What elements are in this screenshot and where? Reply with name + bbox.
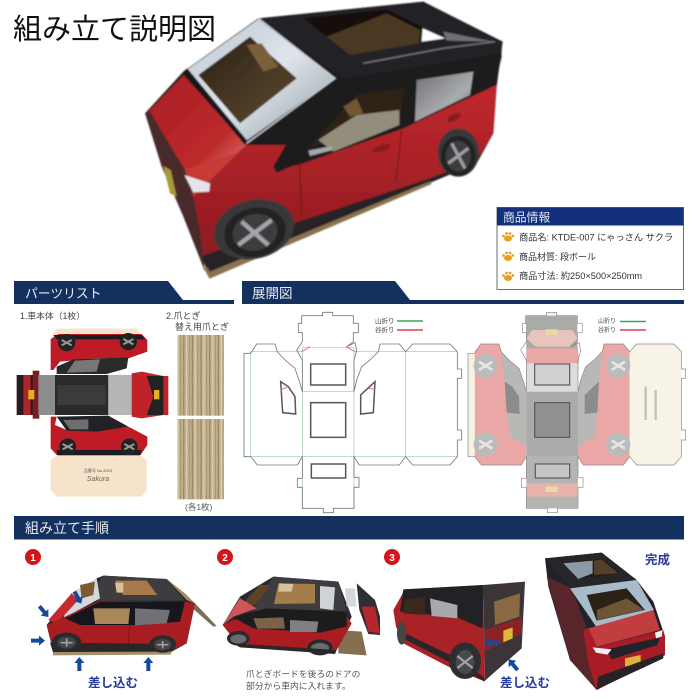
diagram: die-cut line drawing xyxy=(244,312,462,513)
panel: flat printed car sheet xyxy=(17,329,168,497)
icon: paw 2 xyxy=(502,252,514,261)
legend: fold lines, right: 谷折り xyxy=(598,326,616,334)
heading: assembly steps xyxy=(14,516,684,540)
windows xyxy=(281,364,375,478)
heading: assembly steps: 組み立て手順 xyxy=(25,520,109,536)
product information box xyxy=(497,208,684,290)
label: insert, step 1: 差し込む xyxy=(88,675,138,690)
photo: step 2 car with open rear door xyxy=(223,577,380,655)
caption: step 2 xyxy=(246,668,360,691)
cream panel text: Sakura xyxy=(87,476,109,483)
badge: step 3: 3 xyxy=(389,553,395,564)
caption: step 2: 部分から車内に入れます。 xyxy=(246,680,351,691)
badge: step 3 xyxy=(384,549,400,565)
heading: development diagram: 展開図 xyxy=(252,286,292,301)
photo: step 1 car xyxy=(47,576,217,655)
heading: parts list: パーツリスト xyxy=(25,286,102,301)
diagram: coloured die-cut sheet xyxy=(468,312,686,513)
cream panel text: 品番号 No.2023 xyxy=(84,467,113,473)
label: scratching board part: 2.爪とぎ xyxy=(166,310,201,321)
title: 組み立て説明図 xyxy=(13,13,216,46)
legend: fold lines, right: 山折り xyxy=(598,317,616,325)
label: car body part: 1.車本体（1枚） xyxy=(20,310,85,321)
main photo: assembled red cardboard car xyxy=(145,2,503,279)
product information box: 商品材質: 段ボール xyxy=(519,251,596,262)
fold lines xyxy=(251,348,457,509)
scratching boards xyxy=(177,335,224,499)
cut outline xyxy=(244,312,462,513)
badge: step 1 xyxy=(25,549,41,565)
label: scratching board part xyxy=(166,310,229,332)
badge: step 1: 1 xyxy=(30,553,36,564)
badge: step 2: 2 xyxy=(222,553,228,564)
arrows: step 3 insertion points xyxy=(486,638,521,673)
product information box: 商品寸法: 約250×500×250mm xyxy=(519,270,642,281)
heading: development diagram xyxy=(242,281,684,304)
legend: fold lines, left xyxy=(375,316,423,334)
caption: step 2: 爪とぎボードを後ろのドアの xyxy=(246,668,360,679)
label: insert, step 3: 差し込む xyxy=(500,675,550,690)
legend: fold lines, right xyxy=(598,317,646,334)
icon: paw 3 xyxy=(502,272,514,281)
label: complete: 完成 xyxy=(645,552,671,567)
legend: fold lines, left: 谷折り xyxy=(375,325,394,334)
photo: completed car xyxy=(545,553,665,690)
label: quantity: (各1枚) xyxy=(185,502,213,512)
icon: paw 1 xyxy=(502,232,514,242)
photo: step 3 rear view xyxy=(393,582,525,682)
badge: step 2 xyxy=(217,549,233,565)
arrows: insertion points xyxy=(31,589,153,671)
label: scratching board part: 替え用爪とぎ xyxy=(175,321,229,332)
product information box: 商品名: KTDE-007 にゃっさん サクラ xyxy=(519,232,673,242)
cream panel text xyxy=(84,467,113,483)
heading: parts list xyxy=(14,281,234,304)
legend: fold lines, left: 山折り xyxy=(375,316,394,325)
product information box: 商品情報 xyxy=(503,210,550,224)
